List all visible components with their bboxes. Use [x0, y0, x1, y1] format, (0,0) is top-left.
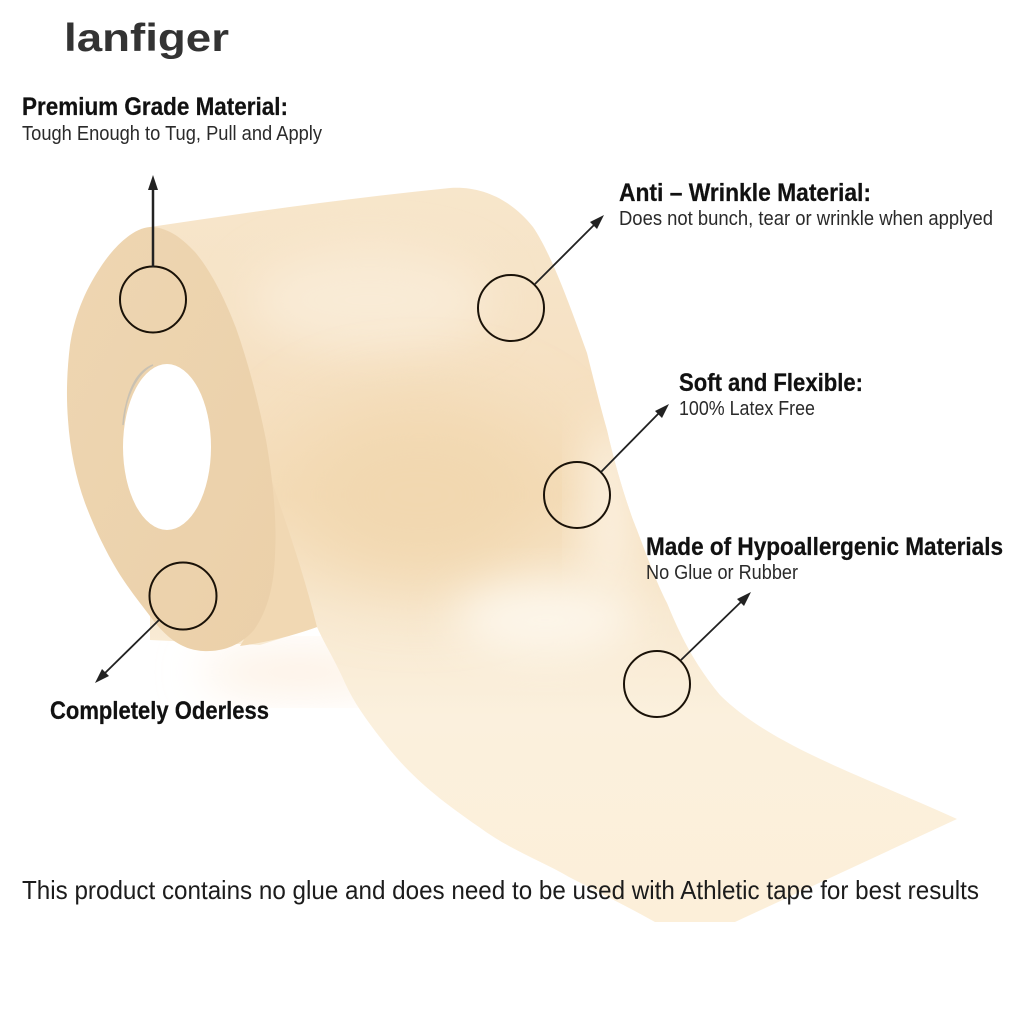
callout: soft and flexible	[544, 369, 863, 528]
callout: anti-wrinkle material: Anti – Wrinkle Material:	[619, 179, 871, 207]
callout: premium grade material	[22, 93, 322, 332]
footer note: This product contains no glue and does need to be used with Athletic tape for best results	[22, 875, 979, 905]
callout: soft and flexible: 100% Latex Free	[679, 398, 815, 420]
roll side below the sheet	[240, 470, 317, 646]
core inner shade	[123, 365, 153, 425]
callout: anti-wrinkle material: Does not bunch, tear or wrinkle when applyed	[619, 208, 993, 230]
callout: premium grade material: Premium Grade Material:	[22, 93, 288, 121]
logo wordmark: lanfiger	[64, 17, 229, 60]
callout: anti-wrinkle material	[478, 179, 993, 341]
callout: hypoallergenic materials	[624, 533, 1003, 717]
callout: completely oderless: Completely Oderless	[50, 697, 269, 725]
roll core hole	[123, 364, 211, 530]
floor glow under roll	[200, 654, 400, 690]
callout: soft and flexible: Soft and Flexible:	[679, 369, 863, 397]
roll end face	[67, 227, 276, 651]
illustration: foam tape roll	[67, 180, 980, 930]
unrolled tape sheet	[150, 188, 956, 922]
callout: hypoallergenic materials: No Glue or Rubber	[646, 562, 798, 584]
callout: completely oderless	[50, 562, 269, 725]
callout: premium grade material: Tough Enough to Tug, Pull and Apply	[22, 123, 322, 145]
